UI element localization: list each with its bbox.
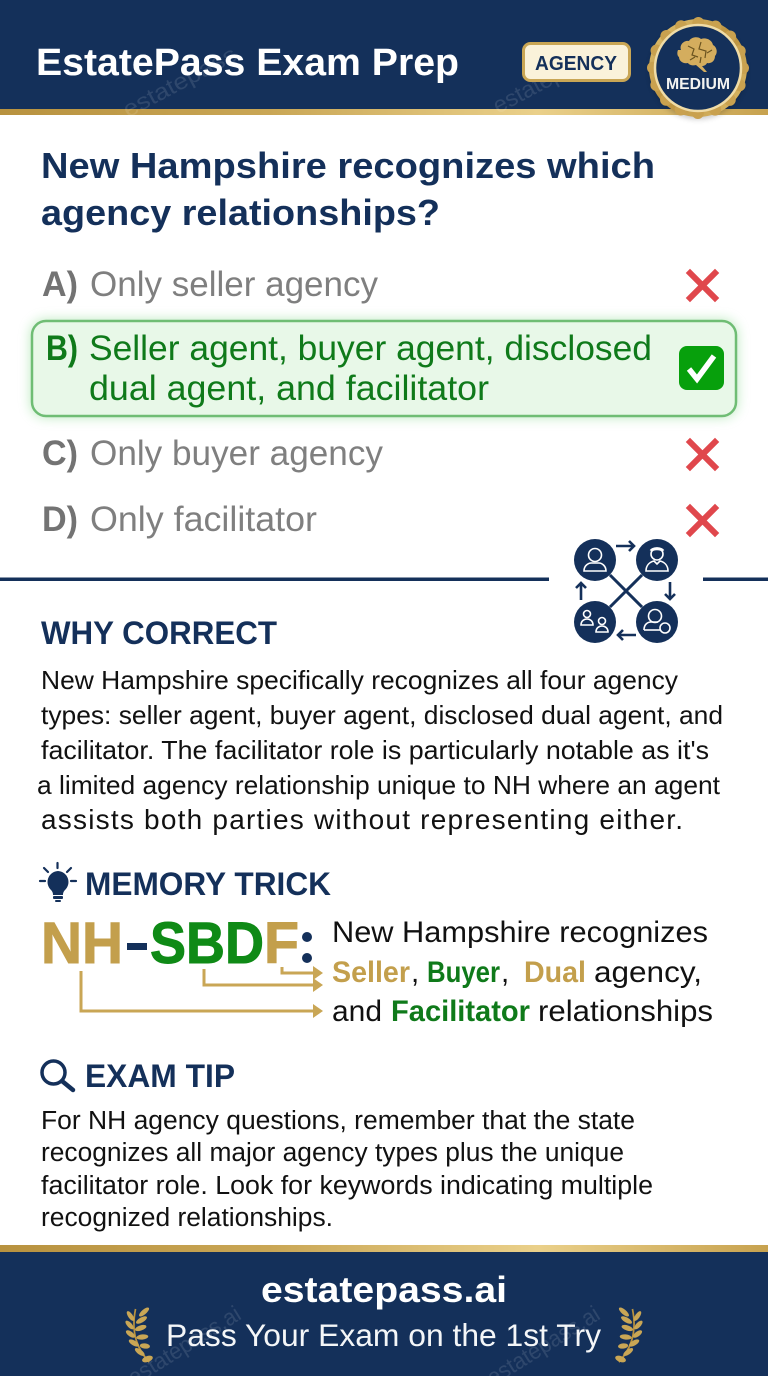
question heading: agency relationships? [41,192,440,233]
option D: D) [42,500,78,539]
option A: Only seller agency [90,264,378,304]
badge: agency [524,44,630,80]
option D [42,499,715,539]
badge: agency: AGENCY [535,52,617,75]
explanation text: assists both parties without representing either. [41,804,683,835]
option C [42,433,715,473]
footer band [0,1245,768,1376]
option B correct [31,320,737,417]
heading: memory trick: MEMORY TRICK [85,866,331,902]
icon: left laurel [124,1306,153,1364]
mnemonic explanation [332,916,713,1028]
mnemonic explanation: , [411,956,419,989]
option B correct: dual agent, and facilitator [89,368,489,408]
mnemonic explanation: New Hampshire recognizes [332,916,708,949]
icon: wrong cross [690,508,715,533]
mnemonic NH-SBDF [41,911,312,976]
mnemonic NH-SBDF: F [264,911,299,976]
mnemonic explanation: Facilitator [391,995,531,1028]
header band [0,0,768,122]
footer site name: estatepass.ai [261,1269,507,1310]
header band: estatepass [118,41,241,122]
header band: estatepa [488,53,580,118]
mnemonic explanation: agency, [594,956,702,989]
explanation text: a limited agency relationship unique to NH where an agent [37,770,721,800]
exam tip text [41,1107,653,1232]
icon: agency relationship network [574,539,678,643]
mnemonic explanation: and [332,995,382,1028]
footer tagline: Pass Your Exam on the 1st Try [166,1317,601,1353]
explanation text: facilitator. The facilitator role is particularly notable as it's [41,735,709,765]
explanation text [37,665,723,835]
heading: exam tip: EXAM TIP [85,1058,235,1094]
icon: right laurel [615,1306,644,1364]
question heading [41,145,655,233]
option C: C) [42,434,78,473]
medal: medium difficulty [649,19,747,119]
question heading: New Hampshire recognizes which [41,145,655,186]
mnemonic arrows [81,966,323,1018]
heading: why correct: WHY CORRECT [41,615,277,651]
mnemonic NH-SBDF: SBD [150,911,264,976]
option B correct: B) [46,329,78,368]
explanation text: New Hampshire specifically recognizes all four agency [41,665,678,695]
header title: EstatePass Exam Prep [36,42,459,84]
option C: Only buyer agency [90,433,383,473]
mnemonic NH-SBDF: NH [41,911,123,976]
icon: wrong cross [690,442,715,467]
medal: medium difficulty: MEDIUM [666,76,730,93]
option A [42,264,715,304]
exam tip text: facilitator role. Look for keywords indicating multiple [41,1172,653,1200]
exam tip text: recognizes all major agency types plus the unique [41,1139,624,1167]
icon: brain [677,37,717,72]
icon: wrong cross [690,273,715,298]
mnemonic explanation: Buyer [427,956,500,989]
mnemonic explanation: Seller [332,956,410,989]
mnemonic explanation: relationships [538,995,713,1028]
option A: A) [42,265,78,304]
icon: magnifier [42,1061,73,1090]
exam tip text: For NH agency questions, remember that the state [41,1107,635,1135]
explanation text: types: seller agent, buyer agent, disclosed dual agent, and [41,700,723,730]
icon: light bulb [40,863,76,902]
exam tip text: recognized relationships. [41,1204,333,1232]
mnemonic explanation: , [501,956,509,989]
mnemonic explanation: Dual [524,956,586,989]
option B correct: Seller agent, buyer agent, disclosed [89,328,652,368]
icon: correct check [679,346,724,390]
option D: Only facilitator [90,499,317,539]
